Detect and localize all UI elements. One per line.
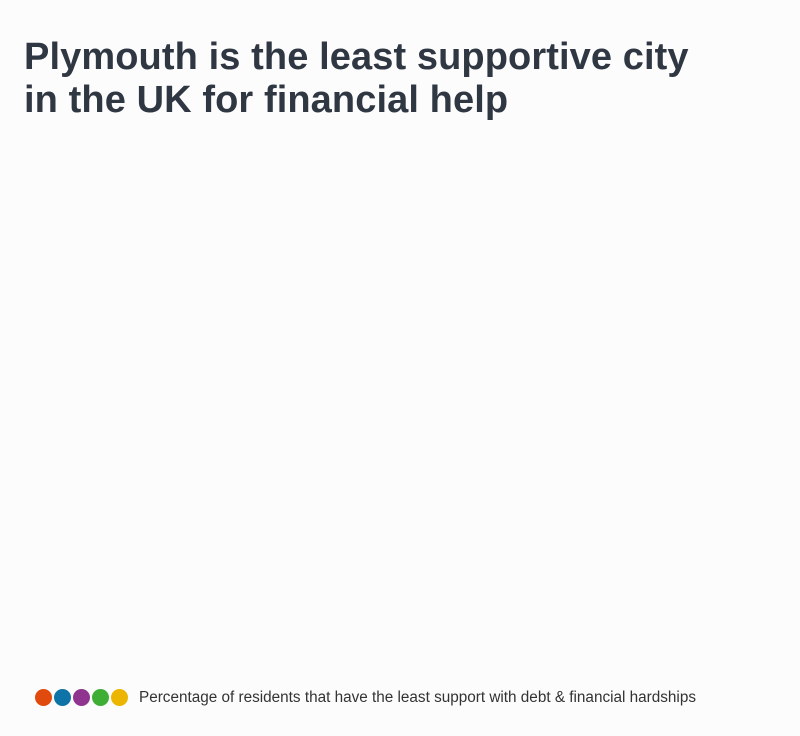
legend text: Percentage of residents that have the least support with debt & financial hardships <box>139 689 696 706</box>
icon: colour dots <box>35 689 128 706</box>
title <box>24 36 689 121</box>
legend <box>35 689 696 706</box>
title: Plymouth is the least supportive city <box>24 36 689 78</box>
title: in the UK for financial help <box>24 79 508 121</box>
